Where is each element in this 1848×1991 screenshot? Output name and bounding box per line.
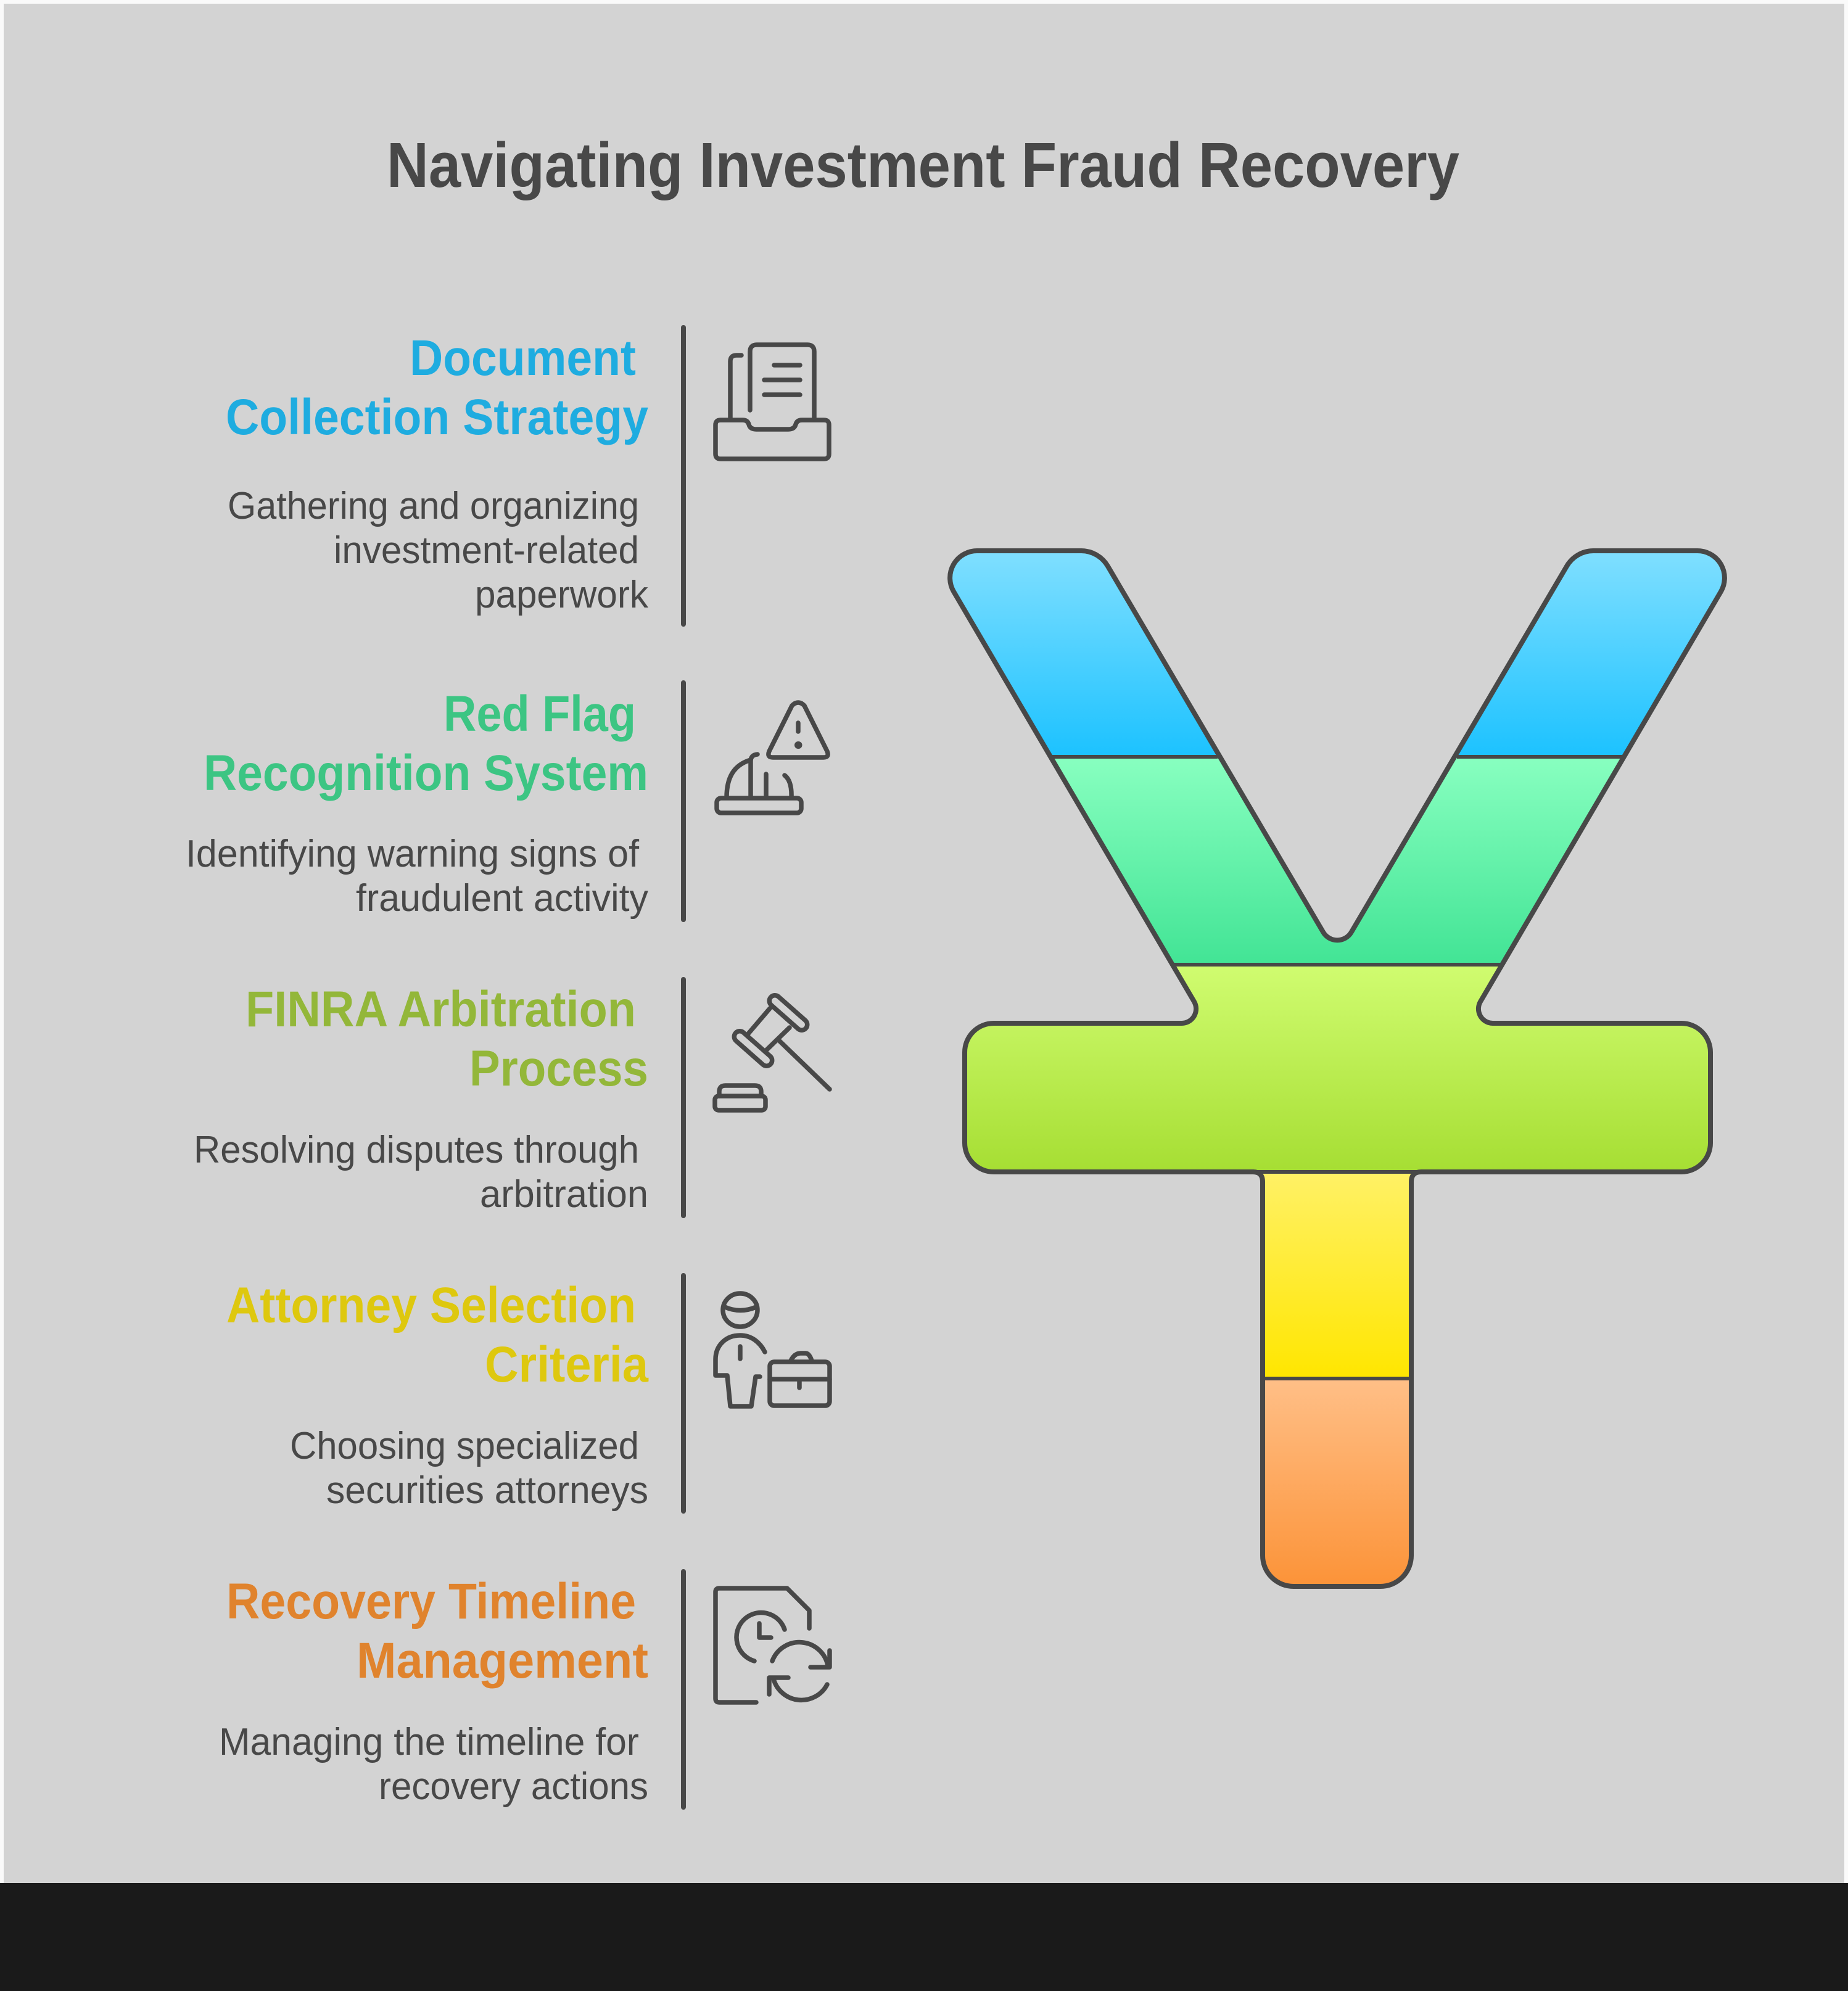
- heading: Criteria: [485, 1337, 649, 1393]
- description: Choosing specialized: [290, 1425, 639, 1467]
- icon: attorney with briefcase: [716, 1293, 830, 1406]
- yen-shaped funnel chart: [944, 546, 1733, 1591]
- heading: Process: [469, 1041, 648, 1097]
- description: fraudulent activity: [356, 877, 648, 920]
- description: recovery actions: [379, 1765, 648, 1808]
- panel: FINRA arbitration process: [194, 979, 830, 1216]
- band: attorney selection (yellow): [1263, 1174, 1411, 1377]
- heading: Collection Strategy: [226, 389, 648, 445]
- panel: recovery timeline management: [219, 1572, 830, 1808]
- icon: document tray: [716, 345, 829, 459]
- panel: red flag recognition system: [186, 683, 828, 920]
- panel: document collection strategy: [226, 328, 829, 624]
- description: investment-related: [334, 529, 639, 572]
- band: document collection (blue): [944, 546, 1733, 757]
- shape outline: [950, 551, 1725, 1586]
- heading: FINRA Arbitration: [245, 981, 636, 1037]
- icon: gavel: [715, 993, 830, 1110]
- heading: Red Flag: [443, 686, 636, 742]
- description: securities attorneys: [326, 1469, 648, 1512]
- band: red flag recognition (green): [1055, 757, 1620, 963]
- description: arbitration: [480, 1173, 648, 1216]
- band: FINRA arbitration (lime): [944, 965, 1733, 1172]
- description: Gathering and organizing: [228, 485, 639, 527]
- heading: Document: [410, 330, 636, 386]
- description: paperwork: [475, 574, 649, 616]
- divider bar: [681, 979, 686, 1216]
- heading: Management: [357, 1633, 648, 1689]
- dark footer band: [0, 1883, 1848, 1991]
- description: Resolving disputes through: [194, 1129, 639, 1171]
- divider bar: [681, 1276, 686, 1511]
- divider bar: [681, 683, 686, 920]
- icon: timeline document with clock and refresh: [716, 1588, 830, 1702]
- title: Navigating Investment Fraud Recovery: [387, 130, 1459, 200]
- description: Identifying warning signs of: [186, 833, 640, 875]
- heading: Recovery Timeline: [226, 1573, 636, 1630]
- band: recovery timeline (orange): [1265, 1380, 1409, 1584]
- icon: warning triangle and alarm bell: [717, 703, 828, 813]
- panel: attorney selection criteria: [226, 1276, 830, 1512]
- divider bar: [681, 328, 686, 624]
- description: Managing the timeline for: [219, 1721, 639, 1763]
- heading: Recognition System: [204, 745, 648, 801]
- heading: Attorney Selection: [226, 1277, 636, 1334]
- divider bar: [681, 1572, 686, 1807]
